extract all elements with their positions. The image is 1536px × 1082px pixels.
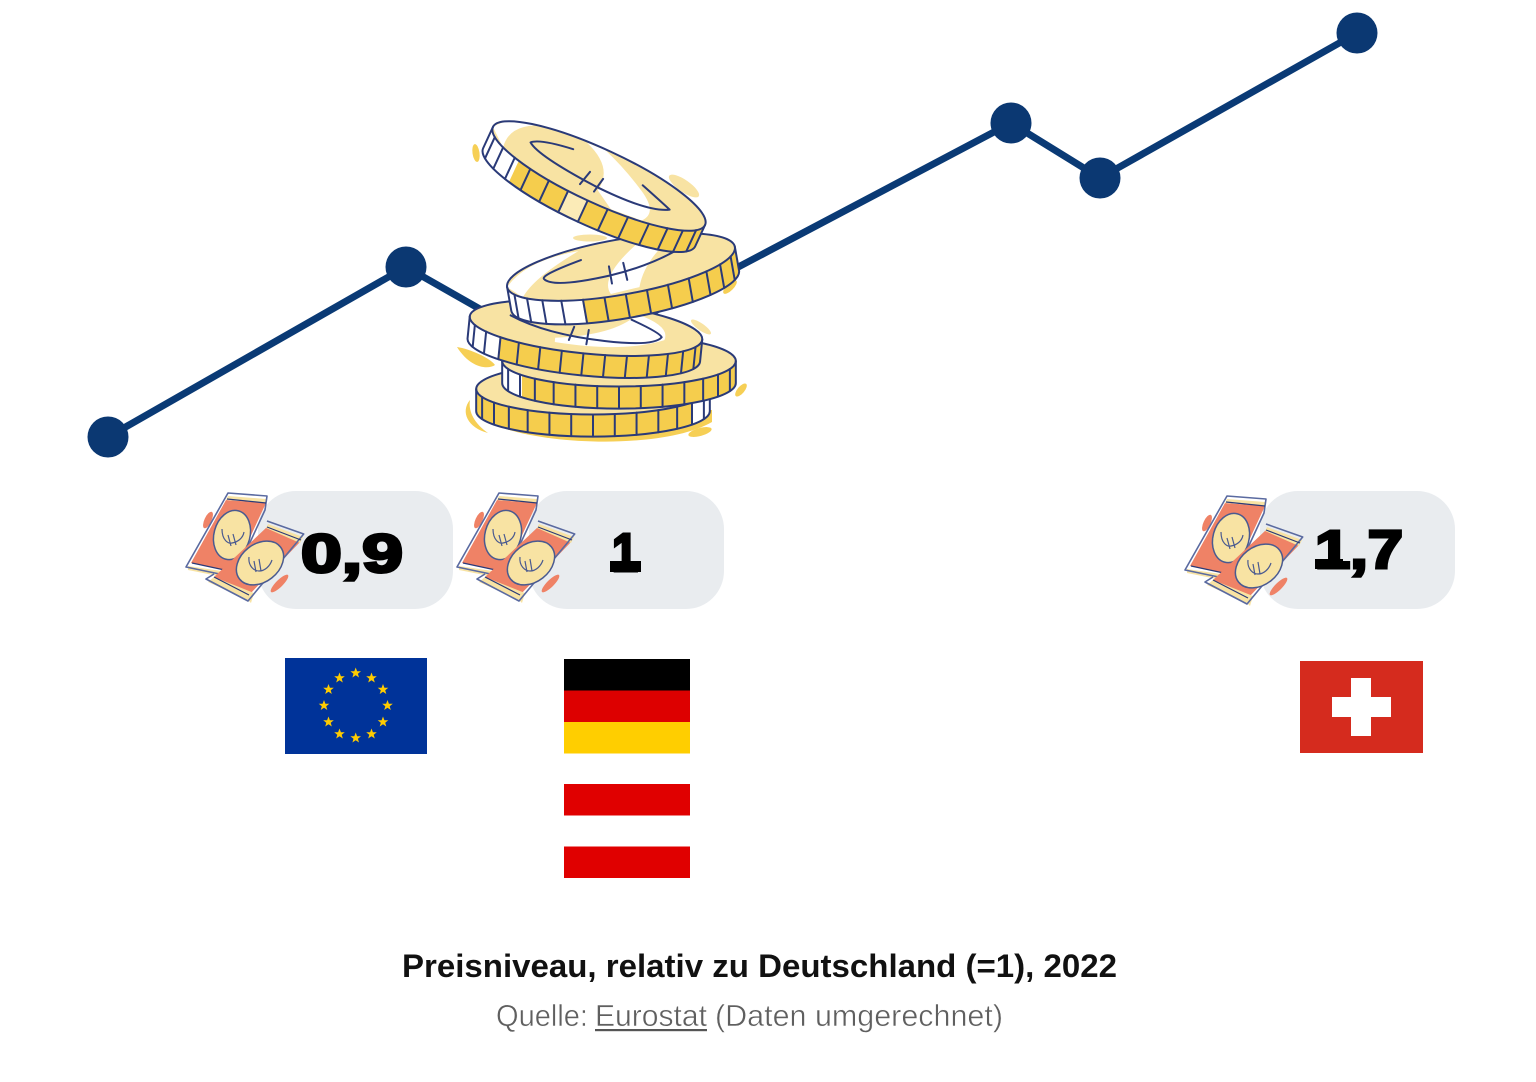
value pill: Switzerland 1,7: 1,7 (1315, 520, 1403, 580)
source line: Eurostat (595, 998, 707, 1033)
coin 1 (top) (472, 102, 716, 271)
line chart (88, 12, 1378, 458)
value pill: Germany and Austria 1: 1 (612, 523, 638, 583)
value pill: Switzerland 1,7 (1185, 491, 1455, 609)
icon: banknotes DE (457, 493, 575, 603)
coin 5 (bottom) (476, 364, 710, 437)
value pill: Germany and Austria 1 (457, 491, 724, 609)
flag: Switzerland (1300, 661, 1423, 753)
flag: EU (285, 658, 427, 754)
source line: (Daten umgerechnet) (715, 998, 1003, 1033)
icon: banknotes EU (186, 493, 304, 603)
icon: stack of coins (457, 102, 749, 442)
value pill: EU 0,9 (186, 491, 453, 609)
coin splashes (457, 144, 749, 442)
flag: Austria (564, 784, 690, 878)
source line (496, 998, 1003, 1033)
source line: Quelle: (496, 998, 588, 1033)
coin 3 (465, 291, 705, 387)
coin 2 (502, 220, 744, 338)
coin 4 (502, 336, 736, 409)
caption title: Preisniveau, relativ zu Deutschland (=1), 2022 (402, 948, 1117, 984)
flag: Germany (564, 659, 690, 754)
value pill: EU 0,9: 0,9 (301, 524, 403, 584)
icon: banknotes CH (1185, 496, 1303, 606)
